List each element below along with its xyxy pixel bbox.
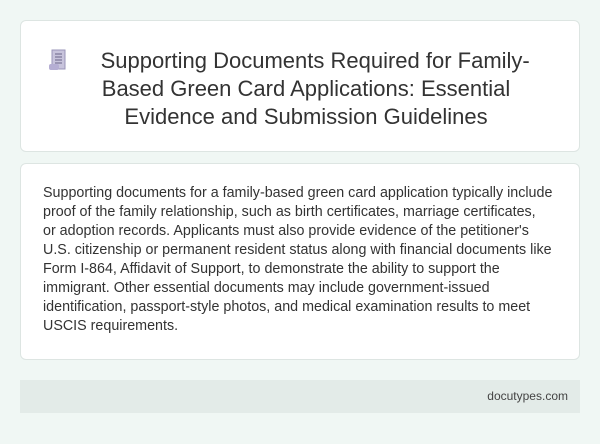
text block: identification, passport-style photos, and medical examination results to meet [43, 299, 530, 315]
text block: USCIS requirements. [43, 318, 178, 334]
footer: docutypes.com [487, 389, 568, 403]
text block: proof of the family relationship, such as birth certificates, marriage certificates, [43, 204, 536, 220]
panel: title card [20, 20, 580, 152]
footer [20, 380, 580, 413]
text block: U.S. citizenship or permanent resident status along with financial documents like [43, 242, 552, 258]
icon: document [49, 50, 66, 70]
title: Supporting Documents Required for Family-Based Green Card Applications: Essential Evidence and Submission Guidelines [101, 48, 530, 129]
text block: or adoption records. Applicants must also provide evidence of the petitioner's [43, 223, 529, 239]
panel: description [20, 163, 580, 360]
text block: Supporting documents for a family-based green card application typically include [43, 185, 552, 201]
text block: Form I-864, Affidavit of Support, to demonstrate the ability to support the [43, 261, 500, 277]
text block: immigrant. Other essential documents may include government-issued [43, 280, 490, 296]
text block [43, 185, 552, 334]
